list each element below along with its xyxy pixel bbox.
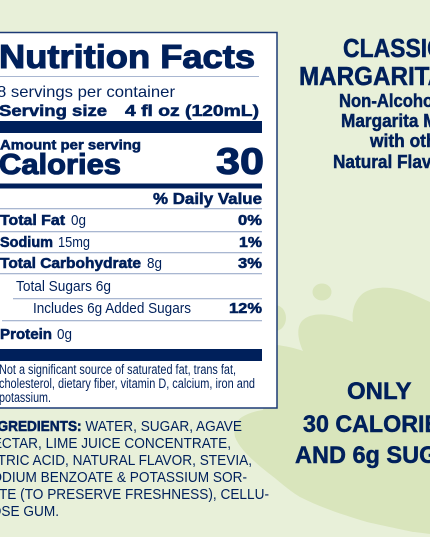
- footnote: [0, 362, 255, 405]
- calories: [0, 141, 264, 182]
- calories: Calories: [0, 149, 121, 181]
- panel: nutrition facts label: [0, 32, 277, 408]
- row: total carbohydrate: [0, 255, 262, 272]
- footnote: potassium.: [0, 390, 51, 405]
- heading: Nutrition Facts: Nutrition Facts: [0, 38, 255, 75]
- row: total carbohydrate: Total Carbohydrate: [0, 256, 141, 272]
- row: total fat: 0g: [71, 212, 86, 229]
- callout: calories and sugar: ONLY: [347, 378, 411, 405]
- product title: [299, 35, 430, 91]
- footnote: cholesterol, dietary fiber, vitamin D, calcium, iron and: [0, 376, 255, 391]
- row: added sugars: Includes 6g Added Sugars: [33, 300, 191, 317]
- row: total fat: Total Fat: [0, 213, 65, 229]
- row: sodium: Sodium: [0, 235, 53, 251]
- row: total sugars: Total Sugars 6g: [16, 278, 111, 295]
- row: sodium: 15mg: [58, 234, 90, 251]
- serving size: [0, 103, 259, 120]
- row: total fat: [0, 212, 262, 229]
- servings per container: 8 servings per container: [0, 84, 176, 101]
- row: total carbohydrate: 8g: [147, 255, 162, 272]
- serving size: Serving size: [0, 103, 107, 120]
- footnote: Not a significant source of saturated fat, trans fat,: [0, 362, 236, 377]
- row: total carbohydrate: 3%: [238, 256, 262, 272]
- row: added sugars: 12%: [229, 301, 262, 317]
- callout: calories and sugar: [295, 378, 430, 469]
- row: total fat: 0%: [238, 213, 262, 229]
- daily value header: % Daily Value: [153, 191, 262, 208]
- row: sodium: [0, 234, 262, 251]
- row: protein: Protein: [0, 327, 52, 343]
- row: protein: [0, 326, 72, 343]
- row: sodium: 1%: [239, 235, 262, 251]
- amount per serving: Amount per serving: [0, 138, 141, 152]
- row: protein: 0g: [57, 326, 72, 343]
- background blob: [234, 284, 430, 534]
- serving size: 4 fl oz (120mL): [125, 103, 259, 120]
- calories: 30: [216, 141, 264, 182]
- ingredients text: [0, 418, 269, 520]
- product description: [333, 90, 430, 172]
